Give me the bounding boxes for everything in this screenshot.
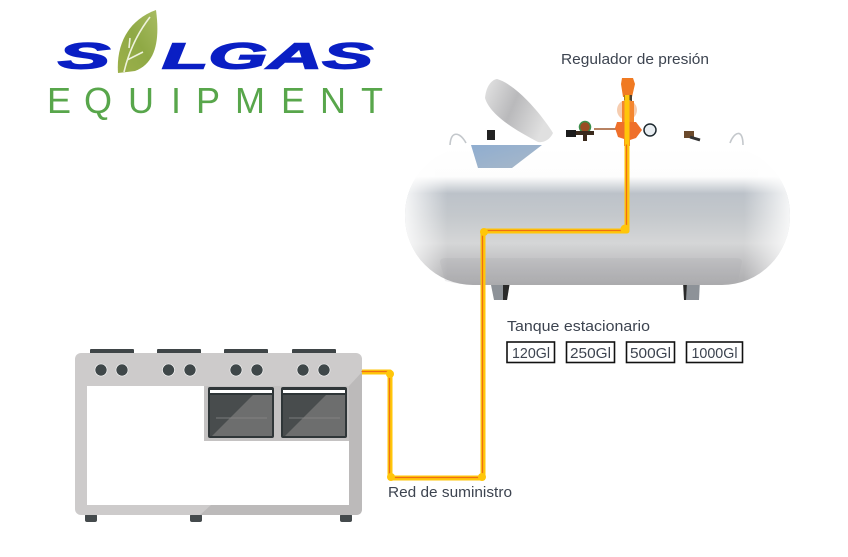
- logo: Solgas Equipment: [47, 10, 383, 121]
- label: pressure regulator: Regulador de presión: [561, 52, 709, 68]
- logo wordmark: LGAS: LGAS: [162, 36, 373, 76]
- logo subtitle: EQUIPMENT: EQUIPMENT: [47, 80, 383, 121]
- tag: 1000Gl: 1000Gl: [692, 345, 738, 362]
- pipe elbows: [386, 224, 630, 481]
- supply pipe: [362, 95, 630, 481]
- tag: 500Gl: [626, 342, 674, 362]
- oven left: [208, 387, 274, 438]
- tank lower band: [440, 258, 742, 285]
- top valve bay: [471, 145, 542, 168]
- tag: 120Gl: 120Gl: [512, 345, 550, 362]
- pressure regulator: [615, 78, 656, 146]
- burner bars: [90, 349, 336, 354]
- icon: leaf: [118, 10, 157, 73]
- tank legs: [490, 280, 700, 300]
- tag: 250Gl: [566, 342, 614, 362]
- pressure gauge: [644, 124, 656, 136]
- tank body: [405, 146, 790, 285]
- label: stationary tank: Tanque estacionario: [507, 319, 650, 335]
- tag: 500Gl: 500Gl: [630, 345, 671, 362]
- feet: [85, 514, 352, 522]
- stove: [75, 349, 362, 522]
- valves on tank: [487, 122, 700, 141]
- tag: 250Gl: 250Gl: [570, 345, 611, 362]
- open lid: [485, 79, 553, 142]
- logo wordmark: S: S: [58, 36, 110, 76]
- label: supply network: Red de suministro: [388, 485, 512, 501]
- knobs: [95, 364, 330, 376]
- stationary tank: [405, 78, 790, 300]
- stove body: [75, 353, 362, 515]
- oven panel: [204, 386, 349, 441]
- tank hooks: [450, 133, 743, 145]
- tank size tags: [507, 342, 742, 362]
- stove white panel: [87, 386, 349, 505]
- tag: 120Gl: [507, 342, 554, 362]
- oven right: [281, 387, 347, 438]
